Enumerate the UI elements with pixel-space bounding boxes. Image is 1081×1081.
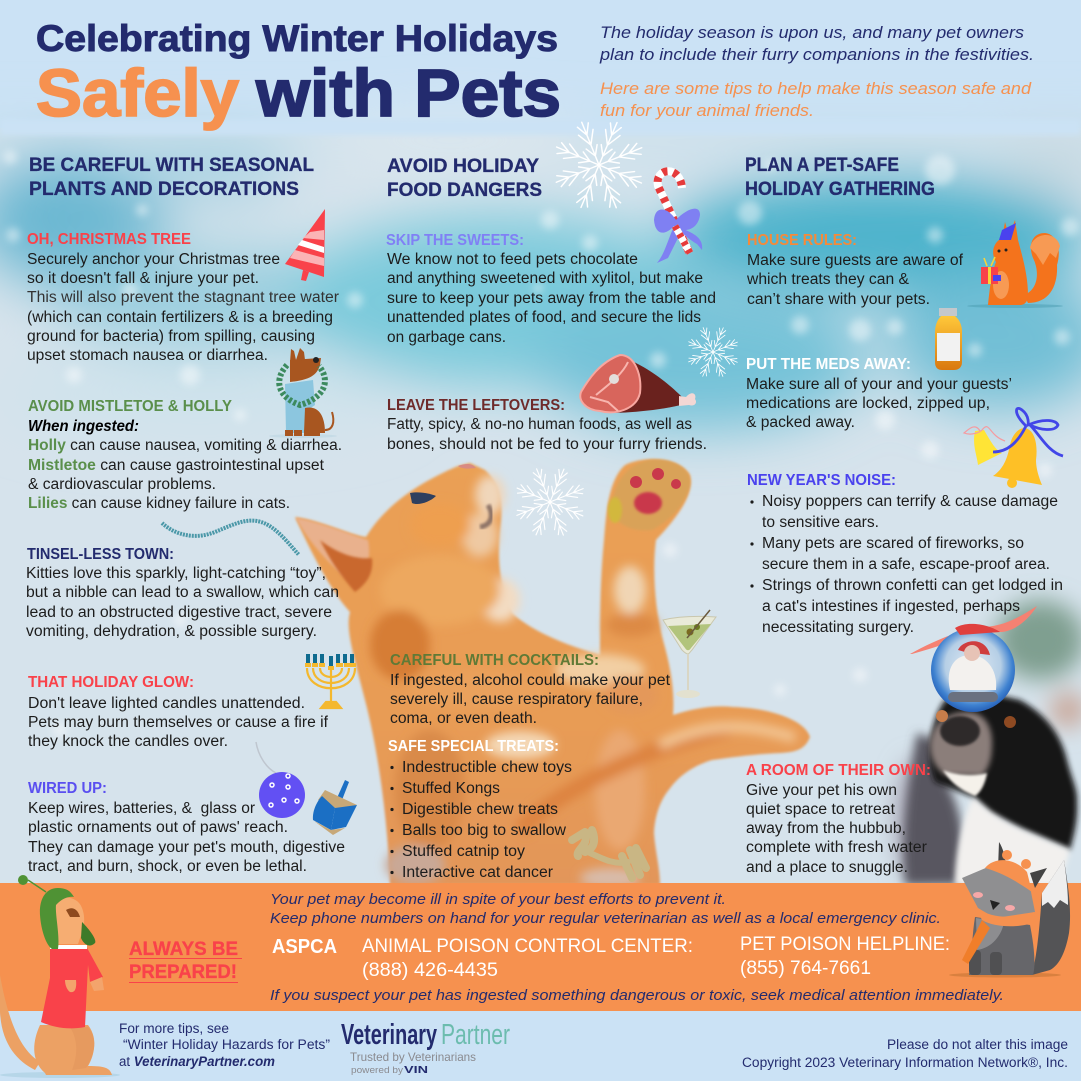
intro text bbox=[599, 24, 1034, 120]
banner text: warning: Keep phone numbers on hand for your regular veterinarian as well as a local emergency clinic. bbox=[270, 910, 941, 927]
tip: Wired Up: Keep wires, batteries, & glass or bbox=[28, 800, 255, 817]
tip: That Holiday Glow: Pets may burn themselves or cause a fire if bbox=[28, 714, 329, 731]
tip: House Rules: HOUSE RULES: bbox=[747, 232, 857, 249]
banner: Pet Poison Helpline contact: (855) 764-7661 bbox=[740, 958, 871, 979]
tip: A Room of Their Own: and a place to snuggle. bbox=[746, 859, 908, 876]
tip: Avoid Mistletoe & Holly: AVOID MISTLETOE & HOLLY bbox=[28, 398, 233, 415]
icon: dreidel bbox=[313, 780, 357, 835]
tip: Oh, Christmas Tree: (which can contain fertilizers & is a breeding bbox=[27, 309, 333, 326]
intro text: The holiday season is upon us, and many pet owners bbox=[600, 24, 1024, 42]
tip: Oh, Christmas Tree bbox=[27, 231, 339, 364]
tip: House Rules: which treats they can & bbox=[746, 271, 910, 288]
tip: Safe Special Treats list: Digestible chew treats bbox=[402, 801, 558, 818]
tip: Put the Meds Away bbox=[746, 356, 1012, 431]
heading: gathering bbox=[745, 154, 935, 200]
tip: A Room of Their Own: A ROOM OF THEIR OWN: bbox=[746, 762, 931, 779]
banner: ASPCA contact: ASPCA bbox=[272, 936, 337, 958]
tip: A Room of Their Own: quiet space to retreat bbox=[746, 801, 896, 818]
character: cat in green hat and red sweater bbox=[0, 875, 120, 1078]
blurred snowy background panel bbox=[0, 119, 1081, 888]
bokeh snow lights bbox=[3, 150, 1079, 737]
banner text: warning bbox=[270, 891, 1004, 1004]
icon: bells bbox=[964, 408, 1063, 488]
tip: A Room of Their Own: Give your pet his own bbox=[746, 782, 897, 799]
tip: Put the Meds Away: & packed away. bbox=[746, 414, 855, 431]
tip: Safe Special Treats list: Stuffed Kongs bbox=[402, 780, 500, 797]
intro text: plan to include their furry companions in the festivities. bbox=[599, 46, 1034, 64]
footer: more tips: For more tips, see bbox=[119, 1021, 229, 1036]
tip: Put the Meds Away: Make sure all of your and your guests’ bbox=[746, 376, 1012, 393]
tip: Skip the Sweets: and anything sweetened with xylitol, but make bbox=[387, 270, 703, 287]
logo: Veterinary Partner: Partner bbox=[441, 1019, 510, 1051]
cat eye and nose bbox=[410, 492, 436, 504]
banner text: warning: Your pet may become ill in spite of your best efforts to prevent it. bbox=[270, 891, 726, 908]
tip: That Holiday Glow: Don't leave lighted candles unattended. bbox=[28, 695, 305, 712]
footer: more tips: at VeterinaryPartner.com bbox=[119, 1054, 275, 1069]
tip: Oh, Christmas Tree: OH, CHRISTMAS TREE bbox=[27, 231, 191, 248]
tip: New Year's Noise list: Noisy poppers can terrify & cause damage bbox=[762, 493, 1058, 510]
icon: large snowflake bbox=[553, 119, 645, 211]
tip: Put the Meds Away: medications are locked, zipped up, bbox=[746, 395, 990, 412]
logo: Veterinary Partner: VIN bbox=[404, 1065, 428, 1076]
title: with Pets bbox=[255, 56, 561, 131]
tip: Safe Special Treats list: Interactive cat dancer bbox=[402, 864, 553, 881]
tip: New Year's Noise list: Strings of thrown confetti can get lodged in bbox=[762, 577, 1063, 594]
tip: New Year's Noise list: Many pets are scared of fireworks, so bbox=[762, 535, 1024, 552]
tip: Leave the Leftovers: bones, should not be fed to your furry friends. bbox=[387, 436, 707, 453]
icon: martini glass bbox=[663, 610, 716, 698]
icon: small snowflake bbox=[687, 326, 739, 378]
icon: medicine bottle bbox=[935, 308, 962, 370]
footer: copyright: Copyright 2023 Veterinary Information Network®, Inc. bbox=[742, 1055, 1068, 1070]
tip: Wired Up bbox=[28, 780, 345, 875]
tip: Careful with Cocktails: severely ill, cause respiratory failure, bbox=[390, 691, 643, 708]
banner text: warning: If you suspect your pet has ingested something dangerous or toxic, seek medical attention immediately. bbox=[270, 987, 1004, 1004]
icon: candy cane and bow bbox=[654, 171, 702, 263]
heading: plants and decorations bbox=[29, 154, 314, 200]
tip: Oh, Christmas Tree: so it doesn't fall & injure your pet. bbox=[27, 270, 259, 287]
tip: Avoid Mistletoe & Holly bbox=[28, 398, 342, 512]
title: Safely bbox=[36, 56, 239, 131]
tip: Skip the Sweets: on garbage cans. bbox=[387, 329, 506, 346]
tip: House Rules: can’t share with your pets. bbox=[747, 291, 930, 308]
tip: Careful with Cocktails: CAREFUL WITH COCKTAILS: bbox=[390, 652, 599, 669]
tip: Tinsel-less Town: but a nibble can lead to a swallow, which can bbox=[26, 584, 339, 601]
tip: Skip the Sweets: unattended plates of food, and secure the lids bbox=[387, 309, 701, 326]
tip: New Year's Noise list: secure them in a safe, escape-proof area. bbox=[762, 556, 1050, 573]
tip: Careful with Cocktails: If ingested, alcohol could make your pet bbox=[390, 672, 671, 689]
tip: A Room of Their Own bbox=[746, 762, 931, 876]
icon: rope chew toy bbox=[572, 830, 646, 878]
cat body and paws bbox=[295, 459, 810, 885]
footer: copyright bbox=[742, 1037, 1068, 1070]
banner: ASPCA contact bbox=[272, 936, 693, 981]
tip: A Room of Their Own: complete with fresh water bbox=[746, 839, 927, 856]
icon: Santa ornament bbox=[910, 606, 1037, 712]
logo: Veterinary Partner: Veterinary bbox=[341, 1019, 437, 1051]
tip: Skip the Sweets: sure to keep your pets away from the table and bbox=[387, 290, 716, 307]
tip: Wired Up: plastic ornaments out of paws' reach. bbox=[28, 819, 288, 836]
icon: squirrel with gift bbox=[967, 220, 1063, 308]
banner: Always be prepared bbox=[129, 939, 242, 983]
tip: That Holiday Glow: they knock the candles over. bbox=[28, 733, 228, 750]
tip: Tinsel-less Town bbox=[26, 546, 339, 640]
tip: Oh, Christmas Tree: This will also prevent the stagnant tree water bbox=[27, 289, 339, 306]
character: fox in orange hat bbox=[949, 842, 1070, 978]
photo: dog with ornament bbox=[895, 600, 1081, 885]
tip: Tinsel-less Town: lead to an obstructed digestive tract, severe bbox=[26, 604, 332, 621]
heading: gathering: HOLIDAY GATHERING bbox=[745, 178, 935, 200]
tip: Careful with Cocktails bbox=[390, 652, 671, 727]
banner: Always be prepared: ALWAYS BE bbox=[129, 939, 238, 960]
title: Celebrating Winter Holidays bbox=[36, 18, 558, 59]
tip: New Year's Noise list: a cat's intestines if ingested, perhaps bbox=[762, 598, 1020, 615]
tip: Avoid Mistletoe & Holly: Holly can cause nausea, vomiting & diarrhea. bbox=[28, 437, 342, 454]
tip: Avoid Mistletoe & Holly: & cardiovascular problems. bbox=[28, 476, 216, 493]
logo: Veterinary Partner: Trusted by Veterinarians bbox=[350, 1050, 476, 1064]
tip: Safe Special Treats list: Stuffed catnip toy bbox=[402, 843, 525, 860]
tip: That Holiday Glow: THAT HOLIDAY GLOW: bbox=[28, 674, 194, 691]
dog nose bbox=[940, 716, 980, 746]
heading: food dangers bbox=[387, 155, 542, 201]
logo: Veterinary Partner bbox=[341, 1019, 510, 1076]
tip: Tinsel-less Town: vomiting, dehydration, & possible surgery. bbox=[26, 623, 317, 640]
cat ear bbox=[296, 518, 369, 585]
tip: Wired Up: WIRED UP: bbox=[28, 780, 107, 797]
icon: snowflake by cat bbox=[515, 467, 585, 537]
tip: Tinsel-less Town: Kitties love this sparkly, light-catching “toy”, bbox=[26, 565, 326, 582]
logo: Veterinary Partner: powered by bbox=[351, 1065, 403, 1076]
tip: Oh, Christmas Tree: ground for bacteria) from spilling, causing bbox=[27, 328, 315, 345]
tip: New Year's Noise list: NEW YEAR'S NOISE: bbox=[747, 472, 896, 489]
footer: more tips bbox=[119, 1021, 330, 1069]
tip: Safe Special Treats list: Indestructible chew toys bbox=[402, 759, 572, 776]
tip: Safe Special Treats list: Balls too big to swallow bbox=[402, 822, 567, 839]
banner: Always be prepared: PREPARED! bbox=[129, 962, 237, 983]
heading: plants and decorations: BE CAREFUL WITH SEASONAL bbox=[29, 154, 314, 176]
icon: tinsel bbox=[162, 521, 299, 555]
tip: Safe Special Treats list: SAFE SPECIAL TREATS: bbox=[388, 738, 559, 755]
photo: orange cat bbox=[295, 459, 810, 888]
banner: Pet Poison Helpline contact bbox=[740, 934, 950, 979]
tip: Careful with Cocktails: coma, or even death. bbox=[390, 710, 537, 727]
tip: Skip the Sweets: SKIP THE SWEETS: bbox=[386, 232, 524, 249]
tip: Leave the Leftovers: Fatty, spicy, & no-no human foods, as well as bbox=[387, 416, 692, 433]
tip: Wired Up: tract, and burn, shock, or even be lethal. bbox=[28, 858, 307, 875]
cat raised paw pads bbox=[612, 460, 690, 530]
heading: food dangers: FOOD DANGERS bbox=[387, 179, 542, 201]
tip: New Year's Noise list: to sensitive ears. bbox=[762, 514, 879, 531]
intro text: Here are some tips to help make this season safe and bbox=[600, 80, 1032, 98]
heading: gathering: PLAN A PET-SAFE bbox=[745, 154, 899, 176]
orange banner bbox=[0, 883, 1081, 1011]
tip: House Rules: Make sure guests are aware of bbox=[747, 252, 964, 269]
tip: New Year's Noise list: necessitating surgery. bbox=[762, 619, 914, 636]
tip: Avoid Mistletoe & Holly: Mistletoe can cause gastrointestinal upset bbox=[28, 457, 325, 474]
tip: Avoid Mistletoe & Holly: When ingested: bbox=[28, 418, 139, 435]
icon: purple ornament bbox=[256, 742, 305, 818]
icon: dog in wreath bbox=[269, 348, 337, 438]
title bbox=[36, 18, 561, 131]
heading: plants and decorations: PLANTS AND DECORATIONS bbox=[29, 178, 299, 200]
tip: House Rules bbox=[746, 232, 964, 308]
banner: ASPCA contact: (888) 426-4435 bbox=[362, 960, 498, 981]
heading: food dangers: AVOID HOLIDAY bbox=[387, 155, 539, 177]
tip: Oh, Christmas Tree: upset stomach nausea or diarrhea. bbox=[27, 347, 268, 364]
tip: Skip the Sweets bbox=[386, 232, 716, 346]
tip: Tinsel-less Town: TINSEL-LESS TOWN: bbox=[27, 546, 174, 563]
banner: Pet Poison Helpline contact: PET POISON HELPLINE: bbox=[740, 934, 950, 955]
tip: New Year's Noise list bbox=[747, 472, 1063, 636]
tip: Wired Up: They can damage your pet's mouth, digestive bbox=[28, 839, 345, 856]
icon: menorah bbox=[305, 654, 356, 708]
tip: Leave the Leftovers bbox=[387, 397, 707, 453]
footer: copyright: Please do not alter this image bbox=[887, 1037, 1068, 1052]
tip: A Room of Their Own: away from the hubbub, bbox=[746, 820, 906, 837]
icon: Christmas tree bbox=[285, 209, 325, 281]
icon: ham bbox=[580, 355, 696, 413]
tip: Leave the Leftovers: LEAVE THE LEFTOVERS: bbox=[387, 397, 565, 414]
tip: Safe Special Treats list bbox=[388, 738, 572, 881]
tip: Put the Meds Away: PUT THE MEDS AWAY: bbox=[746, 356, 911, 373]
tip: Skip the Sweets: We know not to feed pets chocolate bbox=[387, 251, 638, 268]
banner: ASPCA contact: ANIMAL POISON CONTROL CENTER: bbox=[362, 936, 693, 957]
intro text: fun for your animal friends. bbox=[600, 102, 814, 120]
tip: That Holiday Glow bbox=[28, 674, 329, 750]
footer: more tips: “Winter Holiday Hazards for Pets” bbox=[123, 1037, 330, 1052]
tip: Oh, Christmas Tree: Securely anchor your Christmas tree bbox=[27, 251, 280, 268]
tip: Avoid Mistletoe & Holly: Lilies can cause kidney failure in cats. bbox=[28, 495, 290, 512]
